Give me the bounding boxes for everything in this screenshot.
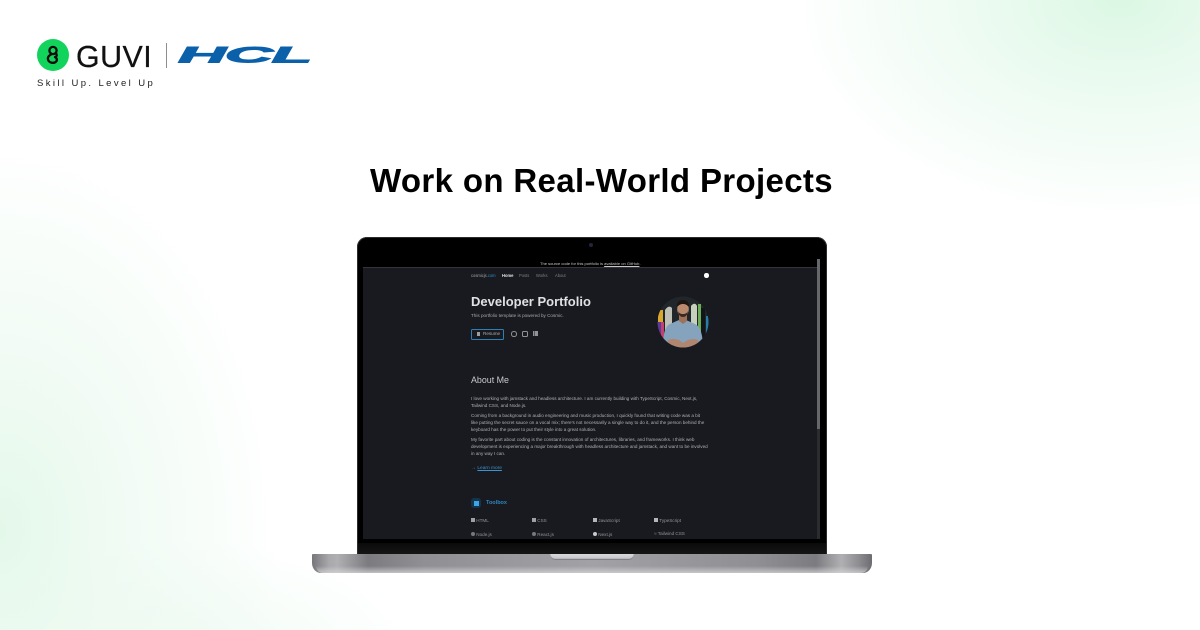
icon: toolbox <box>471 498 481 508</box>
announcement bar: The source code for this portfolio is available on GitHub. <box>540 261 641 266</box>
about paragraph 1 <box>471 396 697 408</box>
about paragraph 2: Coming from a background in audio engineering and music production, I quickly found that writing code was a bit <box>471 412 700 418</box>
social icons <box>511 331 538 337</box>
about paragraph 3 <box>471 437 708 456</box>
about paragraph 2 <box>471 412 704 432</box>
nav: About: About <box>555 272 566 278</box>
about paragraph 2: keyboard has the power to put their style into a great solution. <box>471 427 596 432</box>
toolbox items <box>471 518 685 537</box>
icon: github <box>522 331 528 336</box>
GUVI wordmark: GUVI <box>76 39 152 74</box>
scrollbar thumb <box>817 259 820 429</box>
laptop lid <box>357 237 827 555</box>
screen: portfolio website <box>363 259 820 539</box>
about paragraph 1: Tailwind CSS, and Node.js. <box>471 403 526 408</box>
tool: TypeScript: TypeScript <box>659 518 681 523</box>
scrollbar <box>817 259 820 539</box>
laptop mockup <box>312 237 872 573</box>
page surface <box>363 267 817 540</box>
HCL wordmark: HCL <box>178 42 311 68</box>
nav: Works: Works <box>536 272 548 278</box>
resume icon <box>477 332 480 336</box>
icon: linkedin <box>533 331 538 336</box>
toolbox label: Toolbox <box>486 500 507 506</box>
learn more link: → Learn more <box>471 464 502 470</box>
camera <box>589 243 593 247</box>
about heading: About Me <box>471 374 509 384</box>
profile photo <box>658 296 708 348</box>
resume button <box>471 329 504 340</box>
tagline: Skill Up. Level Up <box>37 78 155 89</box>
navigation <box>471 272 566 278</box>
nav: Posts: Posts <box>519 272 529 278</box>
hero subtitle: This portfolio template is powered by Cosmic. <box>471 312 564 318</box>
about paragraph 1: I love working with jamstack and headless architecture. I am currently building with TypeScript, Cosmic, Next.js, <box>471 396 697 400</box>
tool: Next.js: Next.js <box>598 532 612 536</box>
tool: Tailwind CSS: ≈ Tailwind CSS <box>654 530 685 536</box>
tool: React.js: React.js <box>537 532 554 536</box>
tool: HTML: HTML <box>476 518 489 523</box>
resume label: Resume <box>483 331 500 336</box>
about paragraph 3: in any way I can. <box>471 451 505 456</box>
base highlight <box>316 566 868 573</box>
about paragraph 3: My favorite part about coding is the constant innovation of architectures, libraries, and frameworks. I think web <box>471 437 694 442</box>
nav: Home: Home <box>502 272 513 278</box>
lower bezel <box>358 543 826 554</box>
about paragraph 3: development is experiencing a major breakthrough with headless architecture and jamstack, and want to be involved <box>471 444 708 449</box>
icon: GUVI green circle <box>37 39 69 71</box>
tool: JavaScript: JavaScript <box>598 518 620 523</box>
hero heading: Developer Portfolio <box>471 294 591 309</box>
trackpad notch <box>550 554 634 560</box>
about paragraph 2: like putting the secret sauce on a vocal mix; there's not necessarily a single way to do it, and the person behind the <box>471 420 704 425</box>
divider <box>166 43 167 68</box>
title: Work on Real-World Projects <box>370 162 833 199</box>
tool: CSS: CSS <box>537 518 547 523</box>
icon: website <box>511 331 516 336</box>
theme toggle dot <box>704 273 708 278</box>
site name: cosmicjs.com <box>471 272 496 278</box>
tool: Node.js: Node.js <box>476 532 492 536</box>
laptop base <box>312 554 872 573</box>
logo: GUVI and HCL <box>37 39 311 89</box>
